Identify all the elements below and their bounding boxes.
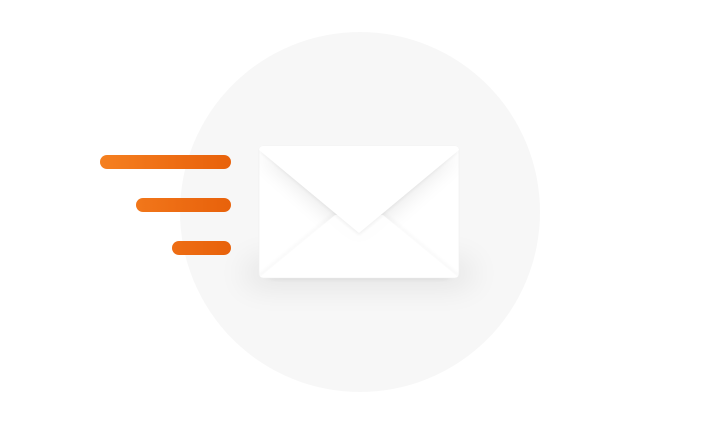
speed line: medium [136,198,231,212]
flap cast shading [273,162,445,218]
top flap [259,146,459,233]
envelope wide shadow [245,262,473,284]
top flap edge shadow [272,162,446,233]
bottom flap edge [259,214,459,276]
bottom flap [328,215,390,236]
speed line: short [172,241,231,255]
background circle [180,32,540,392]
icon: envelope [260,162,458,278]
envelope tight shadow [268,271,450,279]
envelope body [259,146,459,278]
speed lines [100,155,231,255]
speed line: long [100,155,231,169]
